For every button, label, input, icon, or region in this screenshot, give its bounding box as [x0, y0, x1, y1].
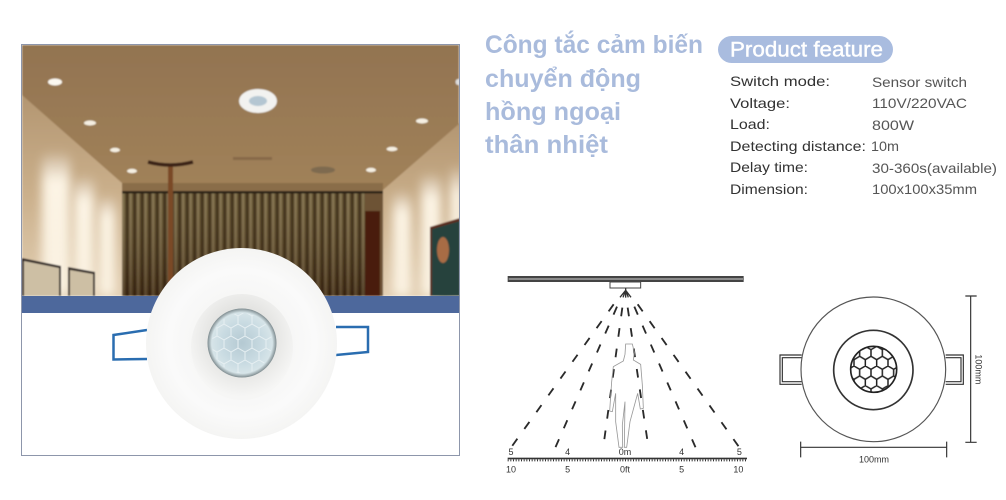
title: Công tắc cảm biến: [485, 29, 703, 59]
sensor device: [146, 248, 337, 439]
icon: left mounting clip: [114, 330, 147, 360]
specification table: Switch mode:: [730, 73, 830, 89]
title: chuyển động: [485, 65, 641, 93]
distance labels: 10: [506, 464, 516, 474]
heading: product feature pill: [718, 36, 893, 63]
distance labels: 5: [565, 464, 570, 474]
outer circle: [801, 297, 946, 442]
floor ruler: [508, 458, 747, 460]
horizontal dimension: 100mm: [859, 455, 889, 465]
left clip: [780, 355, 802, 384]
specification table: 800W: [872, 117, 915, 133]
specification table: 10m: [871, 138, 899, 154]
title: [485, 29, 703, 159]
distance labels: 4: [679, 447, 684, 457]
chart: dimension drawing: [780, 296, 983, 465]
icon: right mounting clip: [336, 327, 368, 355]
chart: detection range diagram: [506, 276, 747, 474]
specification table: Load:: [730, 116, 770, 132]
heading: product feature pill: Product feature: [730, 38, 883, 62]
specification table: Dimension:: [730, 181, 808, 197]
title: thân nhiệt: [485, 131, 609, 159]
distance labels: 5: [737, 447, 742, 457]
person outline: [610, 344, 643, 447]
vertical dimension: 100mm: [973, 354, 983, 384]
inner ring: [834, 330, 913, 410]
distance labels: 5: [679, 464, 684, 474]
specification table: 100x100x35mm: [872, 181, 977, 197]
distance labels: 10: [733, 464, 743, 474]
specification table: Voltage:: [730, 95, 790, 111]
specification table: Sensor switch: [872, 74, 967, 90]
lens honeycomb: [851, 346, 897, 392]
distance labels: 0m: [619, 447, 631, 457]
distance labels: 5: [508, 447, 513, 457]
ceiling bar: [508, 276, 744, 282]
specification table: [730, 73, 997, 197]
distance labels: [506, 447, 743, 474]
horizontal dimension: [801, 442, 947, 465]
distance labels: 4: [565, 447, 570, 457]
specification table: Detecting distance:: [730, 138, 866, 154]
blue band: [22, 296, 459, 313]
sensor on ceiling: [610, 282, 641, 298]
specification table: Delay time:: [730, 159, 808, 175]
title: hồng ngoại: [485, 98, 621, 126]
vertical dimension: [965, 296, 983, 442]
specification table: 110V/220VAC: [872, 95, 967, 111]
room photo: [22, 45, 464, 296]
detection beams: [512, 304, 740, 450]
right clip: [946, 355, 963, 384]
panel: product photo: [22, 44, 464, 456]
specification table: 30-360s(available): [872, 160, 997, 176]
distance labels: 0ft: [620, 464, 630, 474]
